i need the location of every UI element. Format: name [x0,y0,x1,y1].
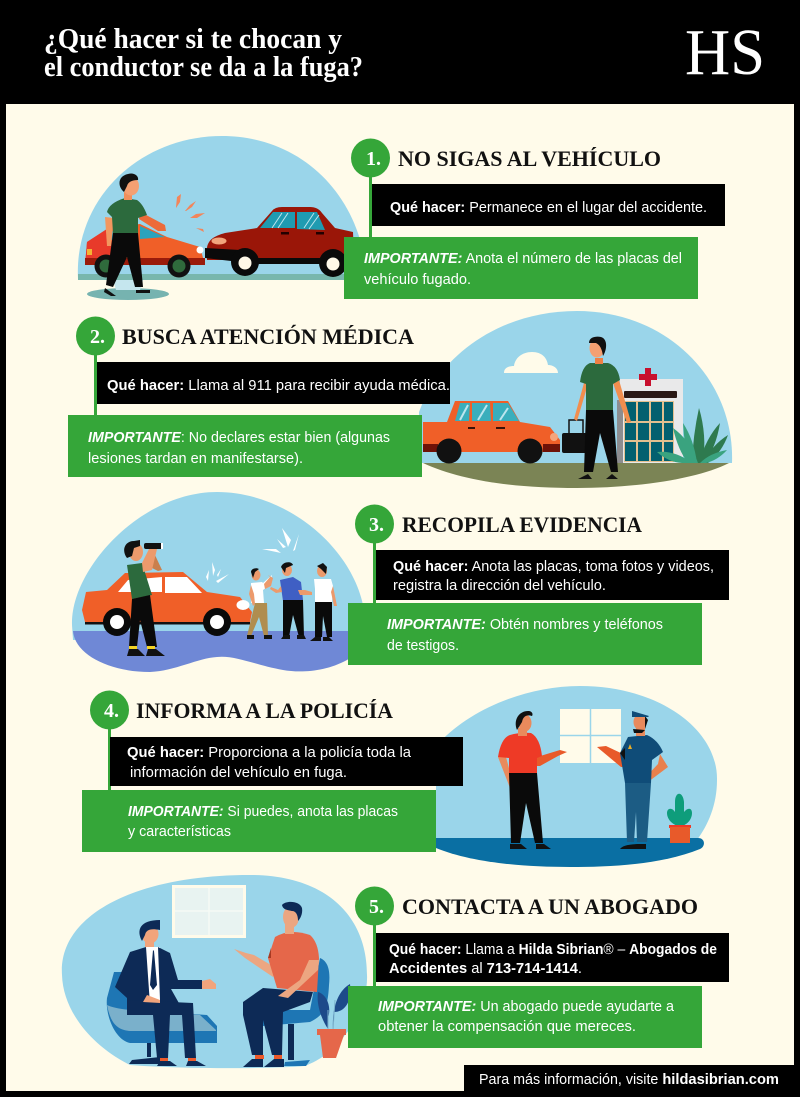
heading: RECOPILA EVIDENCIA [402,512,643,537]
step number [355,886,394,926]
what to do box: Qué hacer: Anota las placas, toma fotos y videos, [393,559,714,575]
panel: step 3 [72,492,729,672]
important box [82,790,436,852]
what to do box: Qué hacer: Permanece en el lugar del accidente. [390,200,707,216]
what to do box: Qué hacer: Proporciona a la policía toda la [127,745,412,761]
step number [90,690,129,730]
title [44,24,363,83]
illustration: crash scene [78,136,367,300]
illustration: gathering evidence [72,492,363,672]
connector line [108,724,111,792]
connector line [373,920,376,988]
illustration: police report [436,686,717,867]
step number: 2. [90,326,105,348]
important box: IMPORTANTE: Si puedes, anota las placas [128,804,398,820]
heading: INFORMA A LA POLICÍA [136,698,394,723]
step number [355,504,394,544]
step number: 5. [369,896,384,918]
step number: 3. [369,514,384,536]
step number [351,138,390,178]
logo: HS monogram: HS [685,16,765,89]
what to do box: Accidentes al 713-714-1414. [389,961,582,977]
important box: obtener la compensación que mereces. [378,1019,636,1035]
important box: y características [128,824,231,840]
footer: website: Para más información, visite hildasibrian.com [479,1071,779,1088]
panel: step 2 [68,311,732,488]
important box: lesiones tardan en manifestarse). [88,451,303,467]
important box: vehículo fugado. [364,272,471,288]
heading: CONTACTA A UN ABOGADO [402,894,698,919]
panel: step 4 [82,686,717,867]
important box [348,603,702,665]
illustration: lawyer meeting [62,875,367,1068]
important box: de testigos. [387,638,459,654]
what to do box [97,362,450,404]
what to do box [110,737,463,786]
step number: 4. [104,700,119,722]
heading: NO SIGAS AL VEHÍCULO [398,146,661,171]
what to do box [372,184,725,226]
important box [344,237,698,299]
connector line [94,350,97,417]
panel: step 5 [62,875,729,1068]
important box [348,986,702,1048]
important box: IMPORTANTE: Obtén nombres y teléfonos [387,617,663,633]
what to do box [376,933,729,982]
important box: IMPORTANTE: No declares estar bien (algunas [88,430,390,446]
step number [76,316,115,356]
heading: BUSCA ATENCIÓN MÉDICA [122,323,415,349]
what to do box: registra la dirección del vehículo. [393,578,606,594]
what to do box: Qué hacer: Llama al 911 para recibir ayuda médica. [107,378,450,394]
what to do box: información del vehículo en fuga. [130,765,347,781]
connector line [373,538,376,606]
title: el conductor se da a la fuga? [44,52,363,83]
what to do box [376,550,729,600]
footer: website [464,1065,800,1097]
illustration: hospital scene [419,311,732,488]
step number: 1. [366,148,381,170]
panel: step 1 [78,136,725,300]
connector line [369,170,372,240]
important box [68,415,422,477]
what to do box: Qué hacer: Llama a Hilda Sibrian® – Abogados de [389,942,717,958]
title: ¿Qué hacer si te chocan y [44,24,342,55]
important box: IMPORTANTE: Anota el número de las placas del [364,251,682,267]
important box: IMPORTANTE: Un abogado puede ayudarte a [378,999,675,1015]
